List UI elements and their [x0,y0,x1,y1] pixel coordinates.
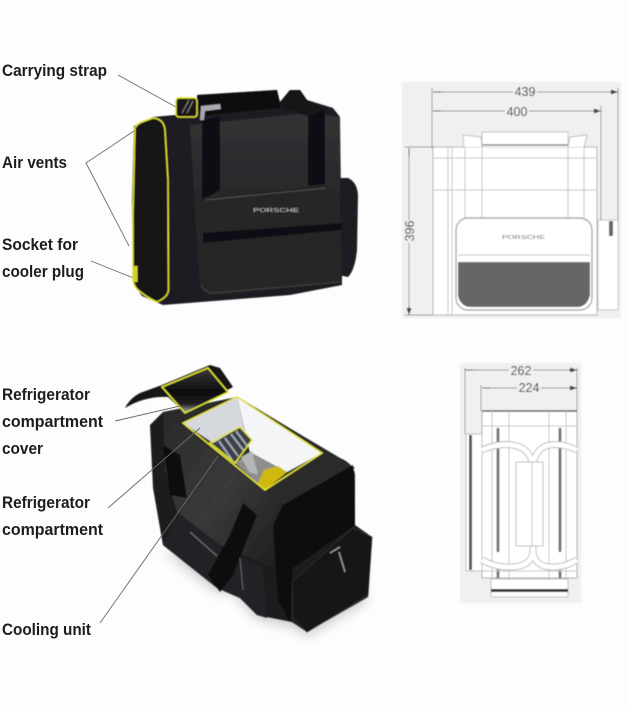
dimension 224 [481,381,577,411]
side pocket [338,178,358,277]
interior walls [183,397,245,443]
technical drawing: front view [402,82,621,318]
front panel [190,113,340,210]
drawing background [460,363,581,603]
top rim [163,397,355,505]
dimension 396 [403,147,433,315]
vertical stripes [498,428,560,578]
label: Refrigerator compartment cover: compartment [2,412,103,431]
dimension 224: 224 [519,381,539,395]
label: Refrigerator compartment: compartment [2,520,103,539]
label: Refrigerator compartment cover: Refrigerator [2,385,90,404]
side handle [208,503,257,592]
lid [125,365,233,413]
left side strap [163,445,187,498]
end panel [273,465,355,622]
lower side pocket [163,512,267,618]
label: Cooling unit: Cooling unit [2,620,91,639]
leader lines: upper bag [86,75,176,279]
handle [516,462,543,546]
dimension 396: 396 [403,221,417,241]
label: Socket for cooler plug: Socket for [2,235,78,254]
pocket [456,218,592,310]
label: Refrigerator compartment: Refrigerator [2,493,90,512]
drawing background [402,82,621,318]
label: Air vents: Air vents [2,153,67,172]
bag body [132,90,342,305]
side pocket [598,220,618,310]
label: Carrying strap: Carrying strap [2,61,107,80]
logo text: PORSCHE [502,235,546,241]
vent panel with yellow outline [133,118,168,302]
bag outline [482,411,577,578]
dimension 400: 400 [507,105,527,119]
technical drawing: side view [460,363,581,603]
interior contents [235,452,287,490]
dimension 262 [465,364,577,434]
dimension 439 [432,85,618,220]
bag body [150,397,372,632]
buckle [200,104,221,120]
label: Socket for cooler plug: cooler plug [2,262,84,281]
handle loops [482,444,533,567]
leader lines: lower bag [100,406,218,623]
zipper [330,547,345,572]
straps [202,116,220,200]
label: Refrigerator compartment cover: cover [2,439,43,458]
cooling unit fins [212,427,252,462]
lower bag: open cooler bag [125,365,372,636]
upper bag: closed cooler bag with Porsche pocket [132,90,358,305]
front pocket [195,185,342,295]
yellow outlines [183,397,322,490]
logo text: PORSCHE [253,208,300,214]
rear panel [466,434,482,571]
construction lines [433,147,597,315]
long side panel [163,412,283,570]
socket highlight [134,266,138,282]
strap highlight [176,98,197,117]
base [491,579,568,597]
bag outline [433,147,597,315]
ground shadow [163,550,368,636]
top panel [197,90,281,116]
dimension 262: 262 [511,364,531,378]
handle [463,132,587,147]
dimension 439: 439 [515,85,535,99]
end pocket [292,528,372,632]
